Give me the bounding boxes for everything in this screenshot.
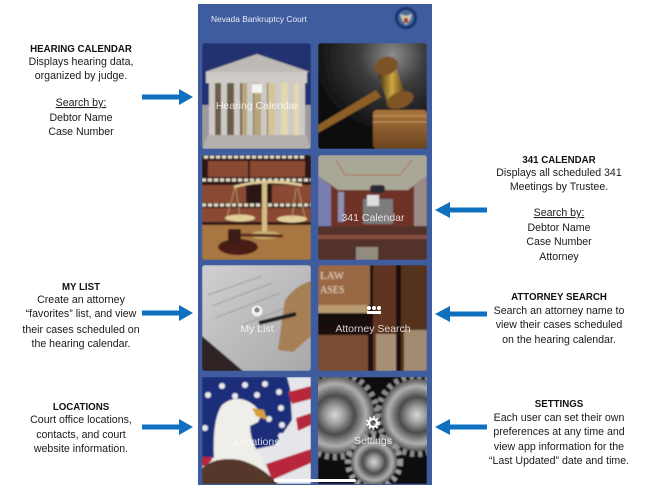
callout: my list: MY LIST — [62, 282, 100, 293]
tile: my list — [202, 265, 311, 371]
tile label: Settings — [354, 435, 392, 447]
callout: attorney search — [494, 292, 624, 346]
callout: hearing calendar: Case Number — [48, 126, 114, 138]
callout: 341 calendar: Debtor Name — [528, 222, 591, 234]
tile: scales of justice — [202, 155, 311, 260]
callout: hearing calendar: Debtor Name — [50, 112, 113, 124]
callout: hearing calendar — [29, 44, 133, 138]
callout: attorney search: ATTORNEY SEARCH — [511, 292, 607, 303]
callout: 341 calendar: Meetings by Trustee. — [510, 181, 608, 193]
callout: locations: website information. — [33, 443, 128, 455]
callout: 341 calendar: Search by: — [534, 207, 584, 219]
tile label: 341 Calendar — [341, 212, 405, 224]
tile label: Attorney Search — [335, 323, 411, 335]
arrow: 341 calendar — [435, 202, 487, 218]
callout: hearing calendar: Displays hearing data, — [29, 56, 133, 68]
callout: locations: LOCATIONS — [53, 402, 110, 413]
callout: hearing calendar: HEARING CALENDAR — [30, 44, 132, 55]
tile: attorney search: ASES — [320, 285, 344, 296]
callout: attorney search: view their cases scheduled — [496, 319, 622, 331]
callout: settings: Each user can set their own — [494, 412, 624, 424]
tile label: Locations — [235, 436, 279, 448]
callout: 341 calendar: Attorney — [539, 251, 579, 263]
callout: my list — [22, 282, 140, 350]
tile: attorney search: LAW — [320, 270, 345, 282]
callout: locations: contacts, and court — [36, 429, 126, 441]
arrow: settings — [435, 419, 487, 435]
arrow: attorney search — [435, 306, 487, 322]
callout: 341 calendar: 341 CALENDAR — [522, 155, 596, 166]
callout: settings: “Last Updated” date and time. — [489, 455, 629, 467]
callout: settings — [489, 399, 629, 467]
callout: attorney search: on the hearing calendar. — [502, 334, 616, 346]
callout: my list: their cases scheduled on — [22, 324, 140, 336]
icon: people — [367, 306, 381, 314]
tile: locations — [202, 377, 311, 484]
icon: gear — [367, 417, 379, 429]
callout: 341 calendar — [496, 155, 622, 263]
icon: person — [252, 306, 262, 316]
arrow: my list — [142, 305, 193, 321]
tile: 341 calendar — [318, 155, 427, 260]
callout: attorney search: Search an attorney name to — [494, 305, 624, 317]
arrow: locations — [142, 419, 193, 435]
arrow: hearing calendar — [142, 89, 193, 105]
tile: attorney search — [318, 265, 427, 371]
callout: settings: preferences at any time and — [493, 426, 625, 438]
callout: 341 calendar: Case Number — [526, 236, 592, 248]
callout: my list: the hearing calendar. — [32, 338, 130, 350]
icon: court seal — [395, 7, 417, 29]
app header title: Nevada Bankruptcy Court — [211, 14, 308, 24]
tile: hearing calendar — [202, 43, 311, 149]
callout: hearing calendar: Search by: — [56, 97, 106, 109]
callout: 341 calendar: Displays all scheduled 341 — [496, 167, 622, 179]
tile: settings — [318, 377, 427, 484]
home indicator — [274, 479, 356, 482]
phone app screen — [198, 4, 456, 488]
callout: settings: view app information for the — [494, 441, 624, 453]
callout: my list: Create an attorney — [37, 294, 126, 306]
callout: locations — [30, 402, 132, 455]
tile label: My List — [240, 323, 274, 335]
tile label: Hearing Calendar — [216, 100, 299, 112]
callout: my list: “favorites” list, and view — [26, 308, 137, 320]
callout: locations: Court office locations, — [30, 414, 132, 426]
callout: hearing calendar: organized by judge. — [35, 70, 127, 82]
tile: gavel — [318, 43, 427, 149]
callout: settings: SETTINGS — [535, 399, 584, 410]
